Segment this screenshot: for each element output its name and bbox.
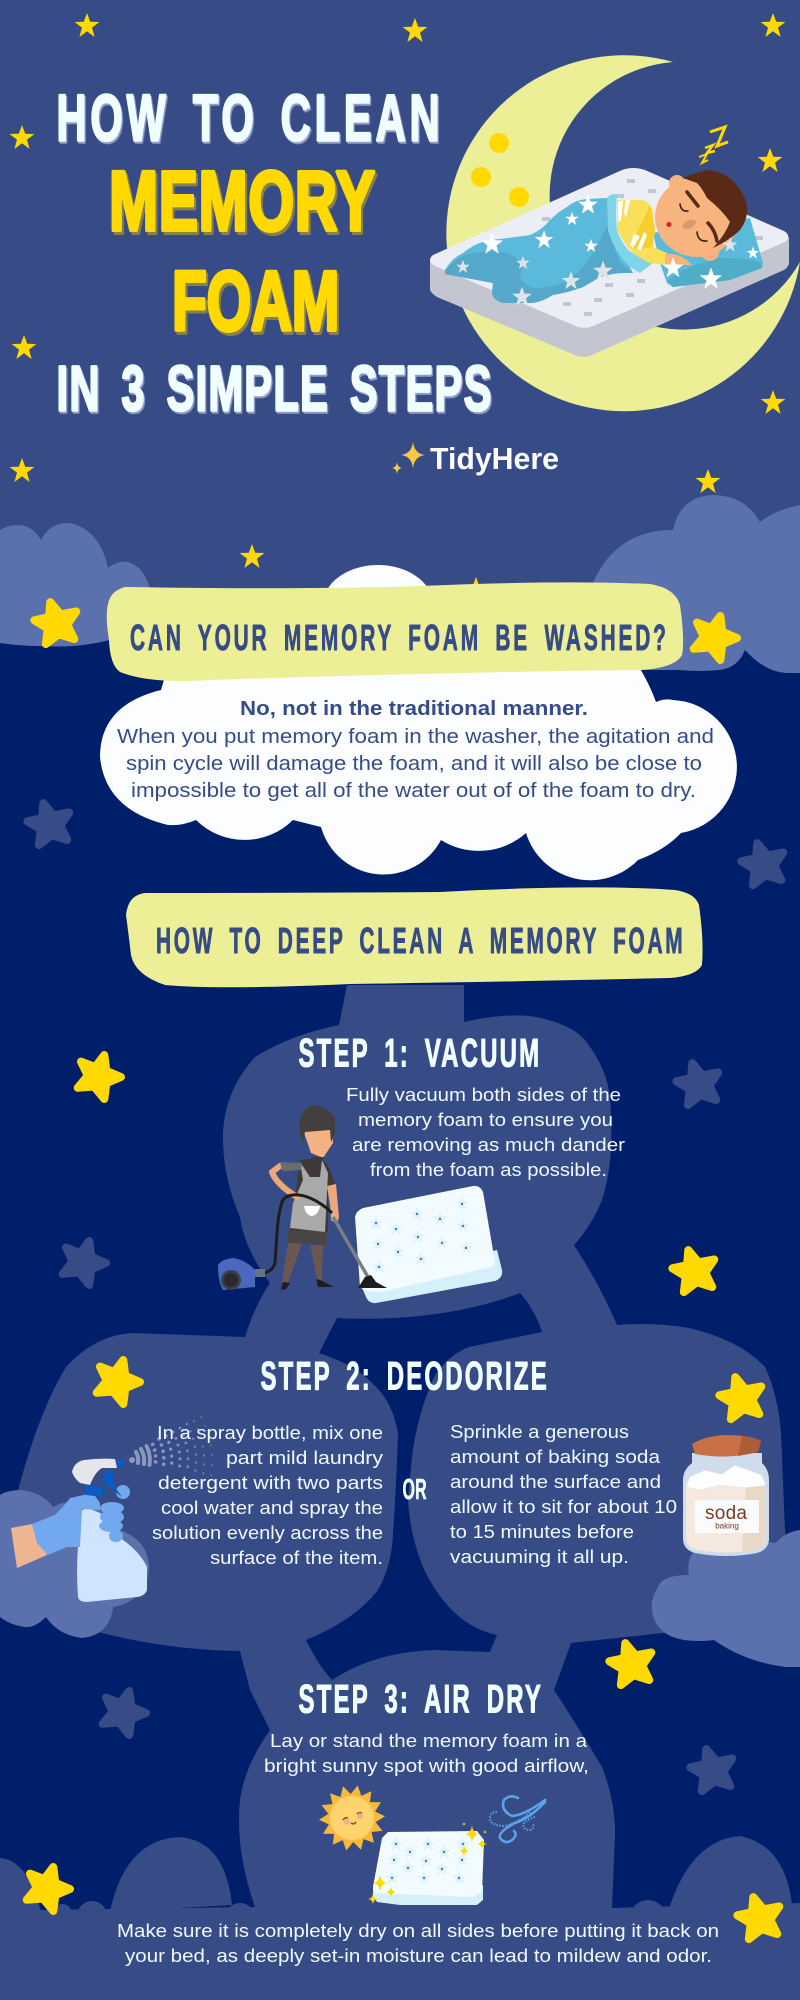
banner: can your memory foam be washed: CAN YOUR MEMORY FOAM BE WASHED? — [130, 618, 666, 659]
text: step 1: are removing as much dander — [352, 1134, 625, 1155]
text: step 1 — [346, 1084, 625, 1180]
text: washing answer: No, not in the traditional manner. — [240, 697, 588, 720]
logo: TidyHere: TidyHere — [430, 441, 559, 476]
panel: white cloud — [100, 565, 737, 880]
text: step 3 intro: bright sunny spot with good airflow, — [264, 1755, 589, 1776]
title: IN 3 SIMPLE STEPS — [56, 354, 491, 425]
text: step 2 baking soda option — [450, 1421, 677, 1567]
icon: gloved hand with spray bottle — [11, 1459, 147, 1602]
text: step 2 spray option: In a spray bottle, mix one — [157, 1422, 383, 1443]
cloud peaks along bottom — [0, 1836, 792, 1936]
icon: woman with vacuum — [218, 1105, 387, 1290]
cloud: top left — [0, 523, 152, 647]
icon: spray mist — [129, 1417, 212, 1476]
text: step 2 baking soda option: to 15 minutes before — [450, 1521, 634, 1542]
heading: step 1: STEP 1: VACUUM — [298, 1030, 539, 1075]
title: HOW TO CLEAN — [56, 81, 440, 155]
text: step 3 closing: Make sure it is completely dry on all sides before putting it back on — [117, 1920, 719, 1941]
heading: step 2: STEP 2: DEODORIZE — [260, 1353, 547, 1398]
text: step 2 baking soda option: Sprinkle a generous — [450, 1421, 629, 1442]
text: step 2 spray option: detergent with two parts — [158, 1472, 383, 1493]
panels: step blobs — [0, 985, 800, 2000]
icon: baking soda jar: baking — [715, 1522, 739, 1530]
label: OR: OR — [402, 1473, 427, 1505]
title: FOAM — [172, 255, 339, 349]
text: washing answer: When you put memory foam in the washer, the agitation and — [117, 725, 714, 748]
icon: child sleeping on mattress — [430, 168, 789, 357]
stars: top sky — [10, 13, 785, 601]
text: step 3 closing: your bed, as deeply set-in moisture can lead to mildew and odor. — [125, 1945, 712, 1966]
banner: how to deep clean — [126, 887, 703, 987]
title: MEMORY — [109, 155, 375, 249]
icon: baking soda jar — [683, 1435, 769, 1556]
text: step 2 baking soda option: amount of baking soda — [450, 1446, 661, 1467]
cloud: lower left — [0, 1490, 149, 1638]
title — [56, 81, 491, 425]
background: night sky — [0, 0, 800, 630]
text: step 1: memory foam to ensure you — [358, 1109, 613, 1130]
text: step 2 spray option: surface of the item. — [210, 1547, 383, 1568]
text: step 2 spray option: solution evenly across the — [152, 1522, 383, 1543]
banner: can your memory foam be washed — [107, 582, 683, 681]
background: deep navy — [0, 630, 800, 2000]
text: step 2 baking soda option: around the surface and — [450, 1471, 661, 1492]
text: step 3 closing — [117, 1920, 719, 1966]
icon: baking soda jar: soda — [705, 1503, 747, 1524]
icon: smiling sun — [319, 1786, 385, 1850]
icon: crescent moon — [446, 55, 800, 411]
text: washing answer: impossible to get all of the water out of of the foam to dry. — [131, 779, 696, 802]
icon: wind swirls — [490, 1796, 545, 1842]
text: step 3 intro: Lay or stand the memory foam in a — [270, 1730, 588, 1751]
icon: snoring Z letters — [699, 127, 728, 163]
stars: dark decorative — [21, 794, 795, 1801]
icon: foam mattress pad — [355, 1186, 502, 1303]
icon: clean mattress with sparkles — [368, 1822, 487, 1905]
text: step 2 spray option — [152, 1422, 384, 1568]
stars: beside first banner — [28, 593, 737, 660]
text: step 1: Fully vacuum both sides of the — [346, 1084, 621, 1105]
banner: how to deep clean: HOW TO DEEP CLEAN A MEMORY FOAM — [156, 921, 683, 962]
text: washing answer — [117, 697, 714, 802]
text: step 2 baking soda option: allow it to sit for about 10 — [450, 1496, 677, 1517]
text: step 1: from the foam as possible. — [370, 1159, 607, 1180]
stars: yellow decorative — [27, 1055, 791, 1949]
heading: step 3: STEP 3: AIR DRY — [298, 1676, 541, 1721]
text: step 3 intro — [264, 1730, 589, 1776]
text: step 2 spray option: cool water and spray the — [161, 1497, 383, 1518]
text: washing answer: spin cycle will damage the foam, and it will also be close to — [126, 752, 702, 775]
text: step 2 baking soda option: vacuuming it all up. — [450, 1546, 629, 1567]
cloud: lower right — [652, 1530, 800, 1667]
cloud: top right — [592, 495, 800, 673]
text: step 2 spray option: part mild laundry — [226, 1447, 384, 1468]
